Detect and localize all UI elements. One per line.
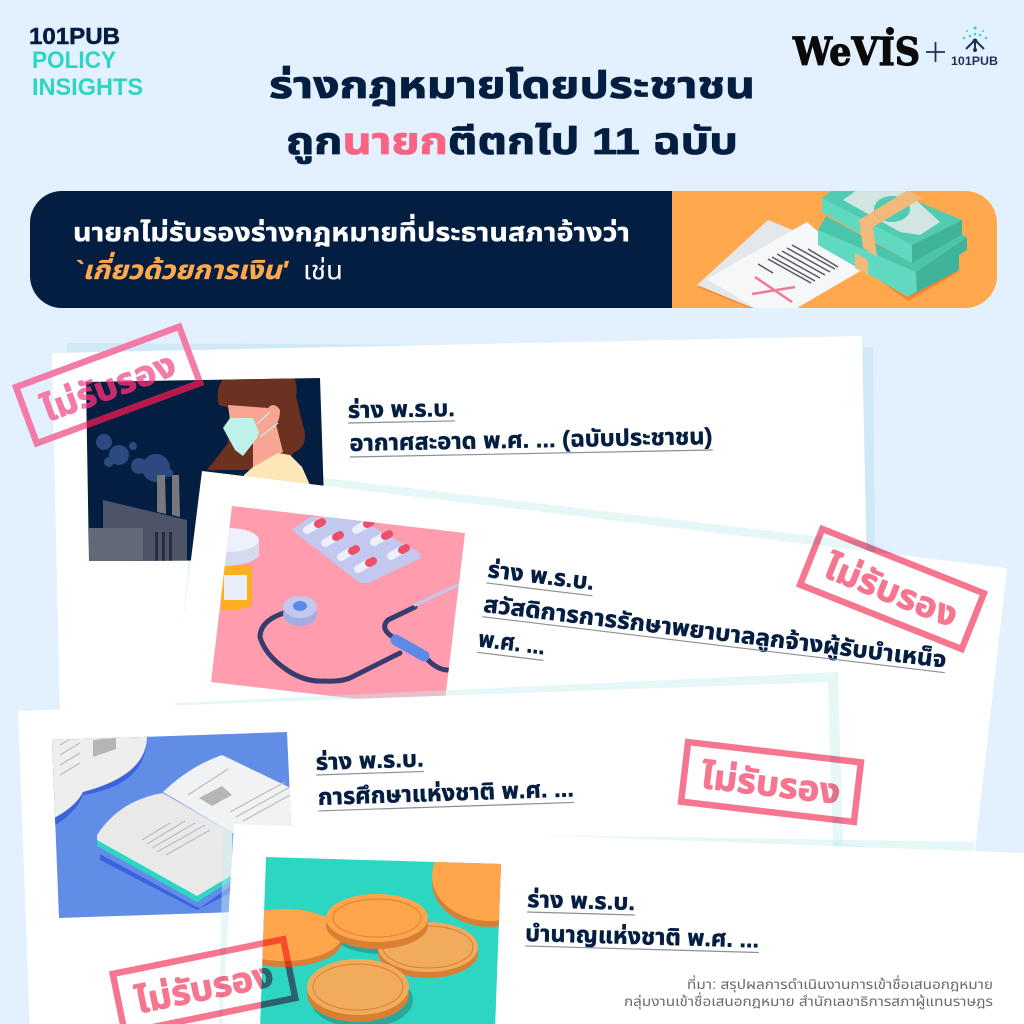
logo: 101PUB Policy Insights: 101PUB xyxy=(29,23,120,49)
bill title: healthcare xyxy=(477,556,952,708)
illustration: coins xyxy=(260,857,501,1024)
source note: ที่มา: สรุปผลการดำเนินงานการเข้าชื่อเสนอกฎหมาย xyxy=(687,975,993,993)
logo: 101PUB Policy Insights xyxy=(29,23,143,101)
bill title: education xyxy=(315,740,574,811)
stamp: not approved: ไม่รับรอง xyxy=(132,955,277,1022)
banner text xyxy=(73,214,630,285)
bill title: education: ร่าง พ.ร.บ. xyxy=(315,745,424,775)
card 3 backing xyxy=(175,672,843,846)
stamp: not approved: ไม่รับรอง xyxy=(36,345,181,430)
banner text: `เกี่ยวด้วยการเงิน' xyxy=(73,252,289,285)
stamp overlap on illustration xyxy=(86,380,204,428)
bill title: clean air xyxy=(348,390,713,457)
bill title: clean air: ร่าง พ.ร.บ. xyxy=(348,395,455,423)
illustration: pills and stethoscope xyxy=(211,506,465,699)
card 1 backing xyxy=(67,343,875,560)
source note xyxy=(624,975,993,1010)
stamp: not approved: ไม่รับรอง xyxy=(819,547,963,635)
illustration: factory and masked woman xyxy=(86,378,324,561)
stamp overlap on illustration: ไม่รับรอง xyxy=(36,345,181,430)
bill title: pension: บำนาญแห่งชาติ พ.ศ. ... xyxy=(525,920,760,952)
panel: card 1 air xyxy=(12,322,866,710)
panel: card 4 pension xyxy=(113,824,1024,1024)
bill title: healthcare: ร่าง พ.ร.บ. xyxy=(486,556,596,595)
bill title: pension: ร่าง พ.ร.บ. xyxy=(527,886,636,915)
illustration: open books xyxy=(52,732,292,918)
bill title: clean air: อากาศสะอาด พ.ศ. ... (ฉบับประชาชน) xyxy=(349,423,713,456)
stamp: not approved xyxy=(16,327,200,443)
bill title: education: การศึกษาแห่งชาติ พ.ศ. ... xyxy=(317,775,574,810)
bill title: healthcare: สวัสดิการการรักษาพยาบาลลูกจ้างผู้รับบำเหน็จ xyxy=(482,591,948,674)
icon: rejected document and banknotes xyxy=(697,188,967,310)
panel: banner xyxy=(30,188,997,310)
source note: กลุ่มงานเข้าชื่อเสนอกฎหมาย สำนักเลขาธิการสภาผู้แทนราษฎร xyxy=(624,992,993,1010)
banner text: เช่น xyxy=(303,255,343,285)
logo: WeVIS + 101PUB: 101PUB xyxy=(951,54,998,68)
banner text: นายกไม่รับรองร่างกฎหมายที่ประธานสภาอ้างว่า xyxy=(73,214,630,247)
bill title: pension xyxy=(525,886,760,952)
stamp: not approved: ไม่รับรอง xyxy=(699,757,843,812)
card 4 backing xyxy=(219,830,974,1024)
stamp: not approved xyxy=(113,939,295,1024)
title xyxy=(269,65,755,164)
panel: card 2 health xyxy=(166,471,1007,860)
logo: 101PUB Policy Insights: POLICY xyxy=(32,47,116,74)
title: ร่างกฎหมายโดยประชาชน xyxy=(269,65,755,106)
card 2 backing xyxy=(171,463,873,760)
stamp: not approved xyxy=(681,742,861,822)
logo: WeVIS + 101PUB: WeVIS xyxy=(792,29,920,74)
logo: 101PUB Policy Insights: INSIGHTS xyxy=(32,74,143,101)
panel: card 3 education xyxy=(18,682,861,1024)
bill title: healthcare: พ.ศ. ... xyxy=(477,626,547,659)
logo: WeVIS + 101PUB xyxy=(792,26,998,74)
title: ถูก นายก ตีตกไป 11 ฉบับ xyxy=(286,121,738,164)
stamp: not approved xyxy=(800,529,984,649)
